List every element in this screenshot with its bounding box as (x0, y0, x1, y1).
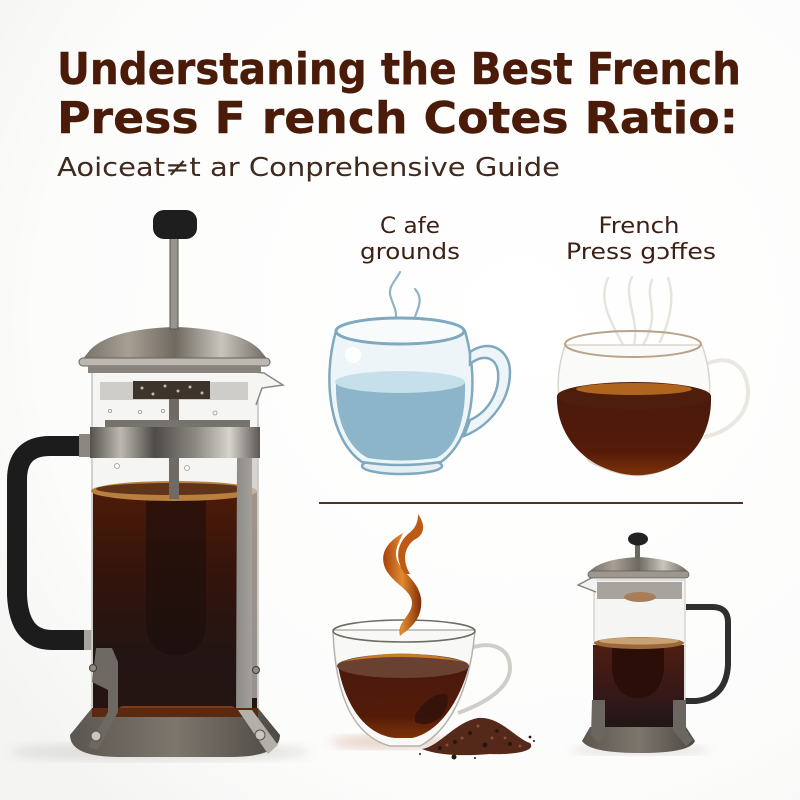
glass (594, 580, 685, 730)
band (90, 427, 260, 458)
large french press (10, 210, 310, 761)
label: french press coffee: French (598, 214, 680, 239)
strap right (236, 458, 276, 752)
glass (333, 630, 475, 746)
handle (684, 607, 728, 701)
rod (635, 543, 640, 559)
glass (92, 372, 258, 714)
tea (338, 666, 469, 738)
filter (100, 382, 248, 400)
bubbles (108, 409, 217, 470)
coffee (593, 645, 684, 730)
knob (153, 210, 197, 239)
foam (91, 481, 257, 501)
rim (336, 318, 464, 344)
handle (464, 346, 510, 436)
foot (362, 458, 442, 474)
rod inside (169, 399, 179, 499)
handle (17, 434, 94, 650)
base (70, 708, 280, 757)
title: Press F rench Cotes Ratio: (57, 93, 738, 144)
flame steam (383, 533, 421, 636)
blue water cup (329, 272, 510, 474)
small french press (570, 532, 728, 755)
divider (319, 502, 743, 504)
handle (458, 645, 510, 713)
spout (578, 575, 597, 592)
steam (390, 272, 424, 328)
coffee (557, 396, 711, 475)
label: cafe grounds: C afe (380, 214, 440, 239)
label: cafe grounds (360, 214, 460, 265)
dark coffee glass cup (557, 277, 748, 476)
label: cafe grounds: grounds (360, 240, 460, 265)
steam (604, 277, 671, 345)
plunger rod (170, 237, 178, 329)
title (57, 44, 741, 144)
handle (704, 360, 748, 437)
plate under band (105, 420, 250, 429)
spout (254, 372, 283, 405)
coffee grounds pile (419, 718, 535, 760)
title: Understaning the Best French (57, 44, 741, 95)
lid (82, 327, 268, 360)
sediment (118, 706, 236, 718)
rim (565, 331, 701, 357)
rim (333, 620, 475, 642)
coffee (93, 492, 257, 716)
subtitle: Aoiceat≠t ar Conprehensive Guide (57, 153, 560, 183)
filter (597, 582, 682, 599)
base (582, 727, 695, 753)
cup glass (329, 331, 472, 465)
label: french press coffee (566, 214, 716, 265)
lid (589, 557, 688, 572)
glass tea cup with steam (330, 514, 510, 749)
knob (628, 532, 648, 546)
label: french press coffee: Press gɔffes (566, 240, 716, 265)
glass (558, 345, 710, 476)
water (336, 383, 465, 460)
